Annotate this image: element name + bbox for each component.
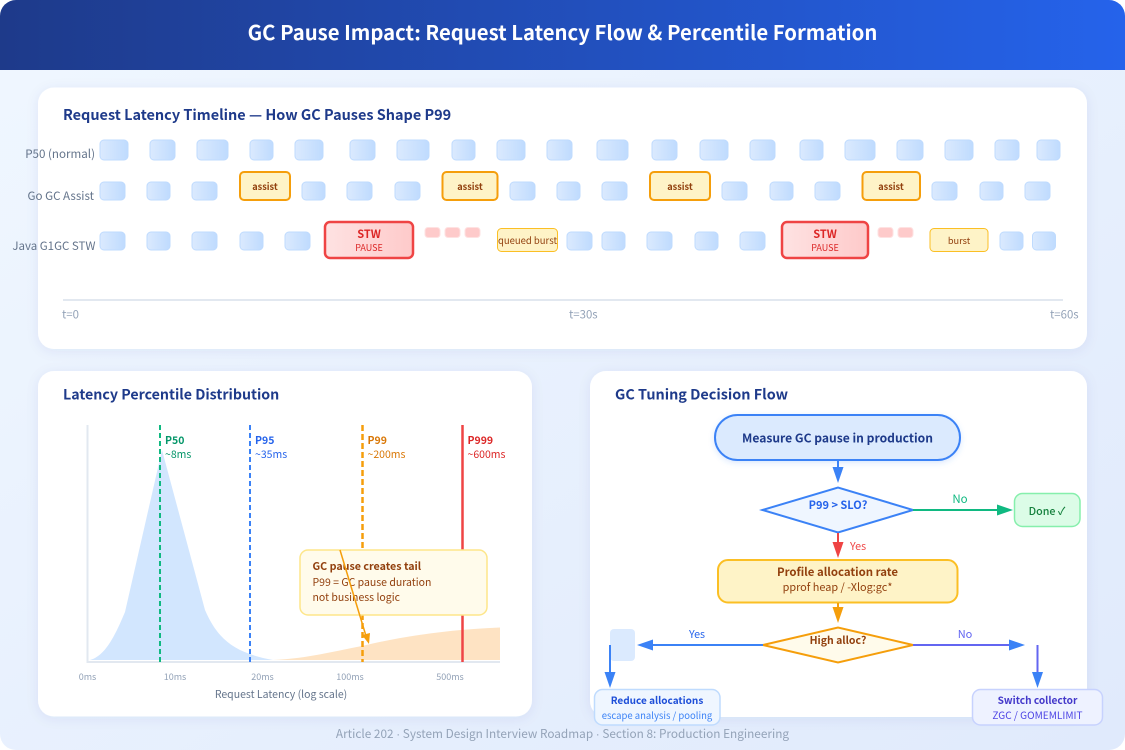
STW pause block 2: STW	[813, 226, 837, 242]
node: reduce allocations: Reduce allocations	[611, 692, 703, 707]
arrow: Yes to profile	[832, 533, 866, 558]
label P95: P95	[255, 433, 274, 448]
node: switch collector: Switch collector	[998, 692, 1078, 707]
label P999: ~600ms	[468, 447, 506, 462]
label P999	[468, 436, 505, 458]
panel: GC tuning decision flow	[590, 371, 1102, 725]
curve: normal requests	[90, 450, 273, 660]
arrow: measure to SLO	[832, 460, 844, 483]
distribution heading: Latency Percentile Distribution	[63, 384, 279, 404]
x axis title: Request Latency (log scale)	[215, 687, 347, 702]
percentile line P50	[159, 425, 161, 662]
arrow: Yes to left: Yes	[688, 627, 705, 642]
percentile line P99	[361, 425, 364, 662]
node: profile allocation rate	[718, 560, 958, 602]
STW pause block 2	[782, 222, 868, 258]
chart axes	[88, 425, 500, 662]
panel: request latency timeline	[12, 88, 1087, 349]
STW pause block 1: STW	[357, 226, 381, 242]
percentile line P999	[461, 425, 464, 662]
label P50: P50	[165, 433, 184, 448]
callout: GC pause creates tail	[312, 559, 422, 574]
burst block: burst	[948, 233, 971, 247]
node: reduce allocations	[594, 690, 720, 725]
arrow: Yes to profile: Yes	[849, 539, 866, 554]
time axis: t=60s	[1050, 306, 1079, 322]
node: reduce allocations: escape analysis / pooling	[602, 708, 713, 722]
node: done	[1014, 494, 1080, 526]
queued burst block: queued burst	[498, 233, 557, 247]
decision: high alloc: High alloc?	[810, 633, 866, 648]
arrow: No to right: No	[958, 626, 973, 642]
time axis: t=0	[62, 306, 79, 322]
arrow: Yes to left	[637, 627, 763, 650]
row: P50 request blocks	[100, 140, 1060, 160]
node: measure	[715, 415, 960, 460]
queued burst block	[498, 228, 558, 252]
assist labels: assist	[667, 179, 693, 193]
node: profile allocation rate: Profile allocation rate	[777, 564, 898, 580]
node: switch collector	[972, 690, 1102, 725]
row: Go assist blocks	[240, 172, 920, 200]
label P999: P999	[468, 433, 493, 448]
row: Java request blocks	[100, 232, 1056, 250]
STW pause block 1: PAUSE	[355, 241, 383, 254]
callout: P99 = GC pause duration	[312, 575, 431, 590]
x axis tick labels: 100ms	[336, 670, 364, 683]
queued small blocks	[425, 228, 913, 238]
arrow: profile to high alloc	[832, 603, 844, 623]
curve: GC tail	[273, 628, 500, 660]
burst block	[930, 228, 988, 252]
callout: not business logic	[312, 590, 401, 605]
node: done: Done ✓	[1029, 504, 1066, 519]
label P99	[368, 436, 405, 458]
decision: high alloc	[763, 628, 913, 662]
label P50: ~8ms	[165, 447, 191, 462]
row label: P50: P50 (normal)	[25, 146, 95, 162]
label P99: P99	[368, 433, 387, 448]
assist labels: assist	[252, 179, 278, 193]
x axis tick labels: 20ms	[251, 670, 274, 683]
arrow: callout to tail	[340, 550, 370, 644]
arrow: No to done: No	[952, 491, 968, 507]
timeline heading: Request Latency Timeline — How GC Pauses Shape P99	[63, 104, 451, 125]
decision: P99 over SLO	[762, 488, 913, 532]
x axis tick labels: 500ms	[436, 670, 464, 683]
arrow: No to right	[913, 626, 1025, 650]
STW pause block 1	[325, 222, 413, 258]
x axis tick labels: 0ms	[79, 670, 96, 683]
row label: Go: Go GC Assist	[27, 188, 95, 204]
flow heading: GC Tuning Decision Flow	[615, 384, 788, 404]
time axis: t=30s	[569, 306, 598, 322]
label P50	[166, 436, 191, 458]
x axis tick labels: 10ms	[164, 670, 186, 683]
label P99: ~200ms	[368, 447, 406, 462]
time axis	[62, 299, 1078, 318]
arrow: down to switch collector	[1032, 645, 1043, 688]
footer: Article 202 · System Design Interview Roadmap · Section 8: Production Engineering	[336, 725, 789, 742]
label P95	[256, 436, 287, 458]
assist labels	[252, 182, 904, 190]
callout	[300, 550, 487, 615]
assist labels: assist	[457, 179, 483, 193]
decision: P99 over SLO: P99 > SLO?	[809, 497, 868, 513]
arrow: No to done	[913, 491, 1013, 516]
panel: latency percentile distribution	[38, 371, 532, 716]
x axis tick labels	[79, 674, 464, 680]
node: profile allocation rate: pprof heap / -Xlog:gc*	[783, 579, 892, 595]
header banner	[0, 0, 1125, 70]
STW pause block 2: PAUSE	[811, 241, 839, 254]
percentile line P95	[249, 425, 251, 662]
row: Go request blocks	[100, 182, 1050, 200]
assist labels: assist	[878, 179, 904, 193]
node: measure: Measure GC pause in production	[742, 430, 933, 446]
row label: Java: Java G1GC STW	[12, 238, 96, 254]
node: switch collector: ZGC / GOMEMLIMIT	[992, 707, 1083, 722]
arrow: down to reduce allocations	[604, 645, 616, 688]
empty node left	[610, 629, 635, 661]
label P95: ~35ms	[255, 447, 287, 462]
title: GC Pause Impact: Request Latency Flow & Percentile Formation	[248, 16, 877, 46]
